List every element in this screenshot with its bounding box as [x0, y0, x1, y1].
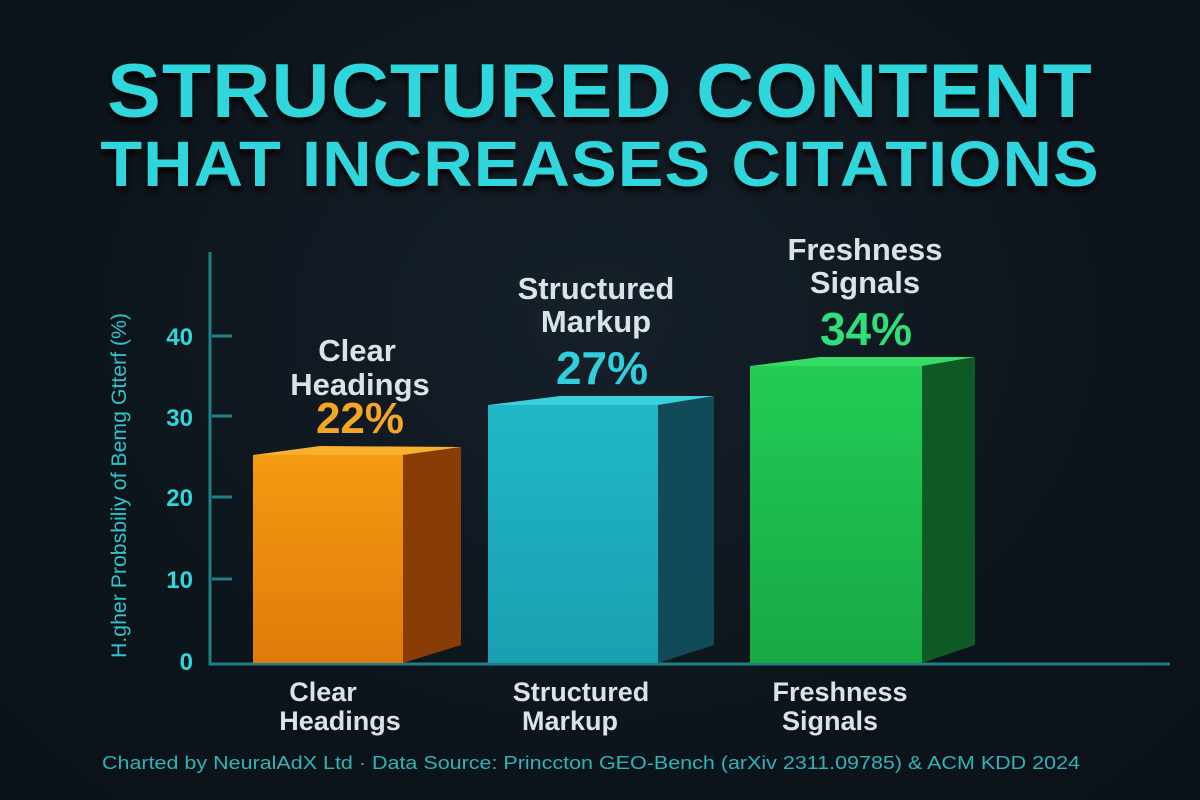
y axis title: H.gher Probsbiliy of Bemg Gtterf (%)	[108, 313, 131, 658]
bar: structured markup: Structured	[518, 271, 674, 306]
y axis labels: 30	[166, 405, 193, 432]
bar: structured markup: 27%	[556, 342, 648, 394]
x axis labels: Markup	[522, 706, 618, 736]
x axis labels: Headings	[279, 706, 401, 736]
footer credit: Charted by NeuralAdX Ltd · Data Source: Princcton GEO-Bench (arXiv 2311.09785) & ACM KDD 2024	[102, 753, 1080, 773]
bar: freshness signals: Signals	[810, 265, 920, 300]
bar: freshness signals	[750, 232, 975, 663]
bar: freshness signals: 34%	[820, 303, 912, 355]
x axis labels: Clear	[289, 677, 357, 707]
y axis labels: 10	[166, 567, 193, 594]
title	[100, 49, 1100, 200]
x axis labels: Structured	[513, 677, 649, 707]
x axis labels	[279, 677, 908, 736]
title: STRUCTURED CONTENT	[107, 49, 1093, 134]
y axis labels: 40	[166, 324, 193, 351]
bar: clear headings	[253, 333, 461, 663]
y axis	[210, 252, 1170, 664]
x axis labels: Signals	[782, 706, 878, 736]
bar: structured markup	[488, 271, 714, 663]
bar: clear headings: Headings	[290, 367, 430, 402]
bar: clear headings: 22%	[316, 394, 404, 443]
y axis labels: 0	[180, 649, 193, 676]
title: THAT INCREASES CITATIONS	[100, 128, 1100, 200]
bar: freshness signals: Freshness	[787, 232, 943, 267]
y axis labels	[166, 324, 193, 676]
bar: clear headings: Clear	[318, 333, 396, 368]
y axis labels: 20	[166, 485, 193, 512]
x axis labels: Freshness	[772, 677, 908, 707]
bar: structured markup: Markup	[541, 304, 651, 339]
